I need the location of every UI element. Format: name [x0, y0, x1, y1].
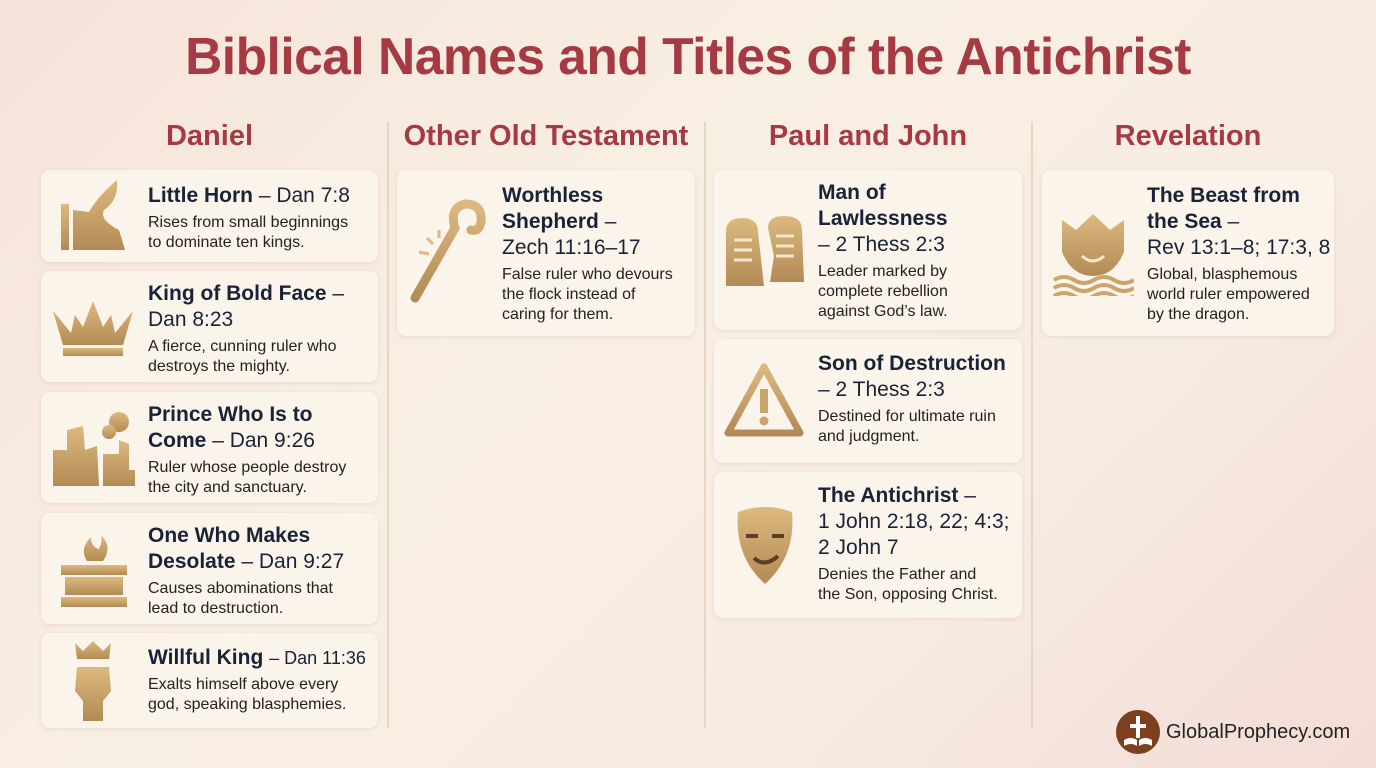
card: Prince Who Is to Come: [41, 392, 378, 503]
card: Willful King: god, speaking blasphemies.: [148, 696, 346, 713]
card: Worthless Shepherd: the flock instead of: [502, 286, 635, 303]
icon: horn: [61, 180, 125, 250]
card: Prince Who Is to Come: Come – Dan 9:26: [148, 429, 315, 452]
card: The Antichrist: the Son, opposing Christ.: [818, 586, 998, 603]
title: Biblical Names and Titles of the Antichrist: [185, 27, 1191, 85]
card: Willful King: Willful King – Dan 11:36: [148, 646, 366, 669]
card: Son of Destruction: Destined for ultimate ruin: [818, 408, 996, 425]
card: The Antichrist: [714, 472, 1022, 618]
card: The Antichrist: 2 John 7: [818, 536, 899, 559]
card: Willful King: Exalts himself above every: [148, 676, 338, 693]
card: Worthless Shepherd: Zech 11:16–17: [502, 236, 641, 259]
card: The Antichrist: The Antichrist –: [818, 484, 976, 507]
card: Worthless Shepherd: Shepherd –: [502, 210, 616, 233]
card: One Who Makes Desolate: Causes abominations that: [148, 580, 333, 597]
icon: crowned fist: [75, 641, 111, 721]
card: The Beast from the Sea: by the dragon.: [1147, 306, 1249, 323]
card: King of Bold Face: [41, 271, 378, 382]
card: Worthless Shepherd: caring for them.: [502, 306, 613, 323]
card: King of Bold Face: King of Bold Face –: [148, 282, 344, 305]
icon: warning triangle: [724, 364, 804, 436]
card: The Beast from the Sea: the Sea –: [1147, 210, 1239, 233]
card: Man of Lawlessness: complete rebellion: [818, 283, 948, 300]
card: Prince Who Is to Come: the city and sanctuary.: [148, 479, 307, 496]
card: Son of Destruction: – 2 Thess 2:3: [818, 378, 945, 401]
icon: broken staff: [410, 200, 486, 302]
card: Little Horn: to dominate ten kings.: [148, 234, 305, 251]
card: Little Horn: [41, 170, 378, 262]
card: Man of Lawlessness: Man of: [818, 181, 886, 204]
card: Worthless Shepherd: Worthless: [502, 184, 603, 207]
card: Little Horn: Rises from small beginnings: [148, 214, 348, 231]
card: One Who Makes Desolate: Desolate – Dan 9:27: [148, 550, 344, 573]
card: Prince Who Is to Come: Prince Who Is to: [148, 403, 313, 426]
heading: Revelation: Revelation: [1115, 120, 1261, 152]
heading: Paul and John: Paul and John: [769, 120, 967, 152]
card: The Beast from the Sea: Global, blasphemous: [1147, 266, 1297, 283]
card: Son of Destruction: Son of Destruction: [818, 352, 1006, 375]
card: Man of Lawlessness: Lawlessness: [818, 207, 948, 230]
card: The Beast from the Sea: [1042, 170, 1334, 336]
card: The Antichrist: 1 John 2:18, 22; 4:3;: [818, 510, 1009, 533]
card: Man of Lawlessness: Leader marked by: [818, 263, 947, 280]
card: King of Bold Face: A fierce, cunning ruler who: [148, 338, 337, 355]
card: Worthless Shepherd: False ruler who devours: [502, 266, 673, 283]
card: King of Bold Face: destroys the mighty.: [148, 358, 290, 375]
logo: [1116, 710, 1350, 754]
card: Man of Lawlessness: – 2 Thess 2:3: [818, 233, 945, 256]
icon: beast from sea: [1053, 214, 1134, 296]
card: Son of Destruction: [714, 339, 1022, 463]
card: Man of Lawlessness: against God’s law.: [818, 303, 948, 320]
logo: GlobalProphecy.com: [1166, 720, 1350, 742]
card: Willful King: [41, 633, 378, 728]
card: One Who Makes Desolate: [41, 513, 378, 624]
icon: bible cross: [1116, 710, 1160, 754]
card: King of Bold Face: Dan 8:23: [148, 308, 233, 331]
icon: broken tablets: [726, 216, 804, 286]
card: Man of Lawlessness: [714, 170, 1022, 330]
card: The Beast from the Sea: Rev 13:1–8; 17:3, 8: [1147, 236, 1330, 259]
card: One Who Makes Desolate: One Who Makes: [148, 524, 310, 547]
icon: crown: [53, 301, 133, 356]
icon: mask: [738, 507, 792, 584]
card: Little Horn: Little Horn – Dan 7:8: [148, 184, 350, 207]
card: Worthless Shepherd: [397, 170, 695, 336]
icon: burning altar: [61, 535, 127, 607]
heading: Daniel: Daniel: [166, 120, 253, 152]
card: Son of Destruction: and judgment.: [818, 428, 919, 445]
icon: ruined city: [53, 412, 135, 486]
card: Prince Who Is to Come: Ruler whose people destroy: [148, 459, 346, 476]
heading: Other Old Testament: Other Old Testament: [404, 120, 688, 152]
card: The Antichrist: Denies the Father and: [818, 566, 976, 583]
card: The Beast from the Sea: world ruler empowered: [1147, 286, 1310, 303]
card: One Who Makes Desolate: lead to destruction.: [148, 600, 283, 617]
card: The Beast from the Sea: The Beast from: [1147, 184, 1300, 207]
